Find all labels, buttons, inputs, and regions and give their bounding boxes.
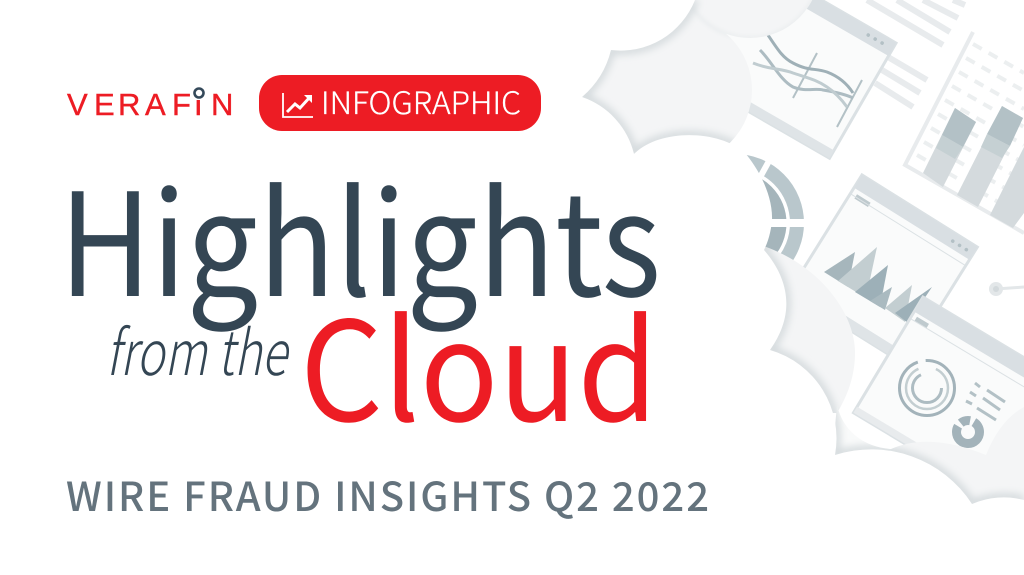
subtitle: from the: from the <box>106 303 291 393</box>
panel: radial chart window <box>853 297 1024 495</box>
logo: Verafin: VERAFIN <box>67 87 233 122</box>
icon: rising chart <box>283 93 313 117</box>
panel: mountain chart window <box>789 175 977 364</box>
icon: network node <box>989 282 1024 296</box>
bar chart <box>905 32 1024 233</box>
text lines top <box>867 0 965 107</box>
title: Highlights: Highlights <box>59 131 661 338</box>
subheading: WIRE FRAUD INSIGHTS Q2 2022 <box>66 465 709 523</box>
title: Cloud: Cloud <box>300 261 658 461</box>
badge: infographic: INFOGRAPHIC <box>321 78 521 123</box>
panel: light grey cloud lobes <box>582 0 1024 520</box>
badge: infographic <box>259 75 541 131</box>
panel: line chart window <box>665 0 896 158</box>
donut chart <box>673 150 810 285</box>
charts background <box>665 0 1024 495</box>
